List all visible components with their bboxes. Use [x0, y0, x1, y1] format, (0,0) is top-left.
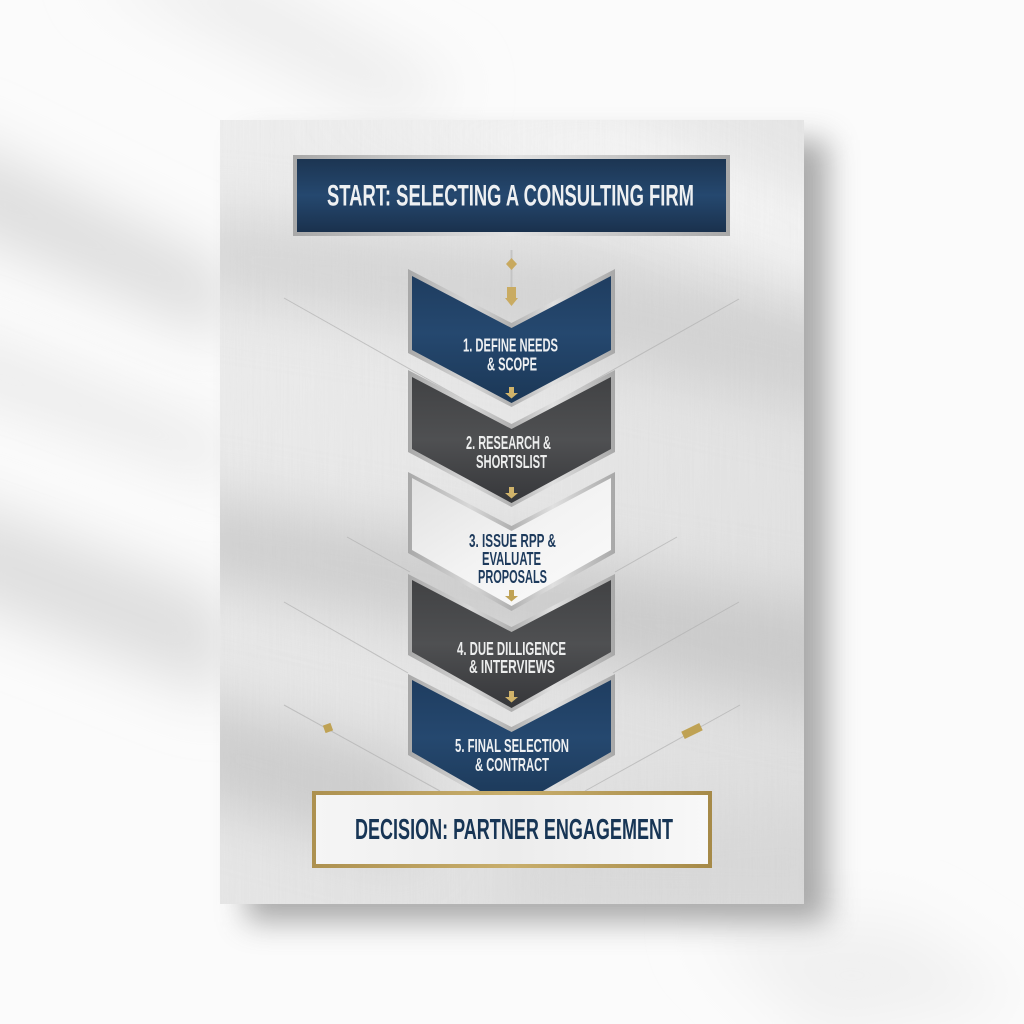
gold accent left — [323, 723, 333, 733]
banner title: START: SELECTING A CONSULTING FIRM — [327, 180, 694, 212]
step 2 arrow — [505, 487, 518, 498]
connector: line, diamond and gold arrow — [505, 250, 518, 306]
step 5 label: 5. FINAL SELECTION — [455, 735, 569, 756]
step 3 label: PROPOSALS — [478, 566, 547, 587]
step 4 arrow — [505, 691, 518, 702]
step 1 arrow — [505, 387, 518, 398]
panel shadow — [246, 140, 828, 922]
start banner — [293, 155, 730, 236]
step 1 label: 1. DEFINE NEEDS — [463, 334, 558, 356]
decorative guide lines — [284, 298, 740, 791]
step 4 label: 4. DUE DILLIGENCE — [457, 638, 566, 659]
step 4 label: & INTERVIEWS — [469, 656, 555, 677]
step 2 label: SHORTSLIST — [476, 451, 547, 472]
gold accent right — [681, 723, 703, 739]
step 3 arrow — [505, 590, 518, 602]
step 3 chevron — [408, 472, 615, 611]
step 4 chevron — [408, 574, 615, 712]
step 3 label: 3. ISSUE RPP & — [469, 530, 556, 551]
step 1 chevron — [408, 269, 615, 407]
decision box — [312, 791, 712, 868]
step 5 chevron — [408, 674, 615, 813]
decision title: DECISION: PARTNER ENGAGEMENT — [355, 814, 673, 846]
step 2 chevron — [408, 370, 615, 507]
step 3 label: EVALUATE — [482, 548, 541, 569]
step 2 label: 2. RESEARCH & — [466, 432, 551, 453]
step 1 label: & SCOPE — [487, 354, 537, 374]
panel: brushed silver sheet — [220, 120, 804, 904]
step 5 label: & CONTRACT — [475, 754, 549, 775]
